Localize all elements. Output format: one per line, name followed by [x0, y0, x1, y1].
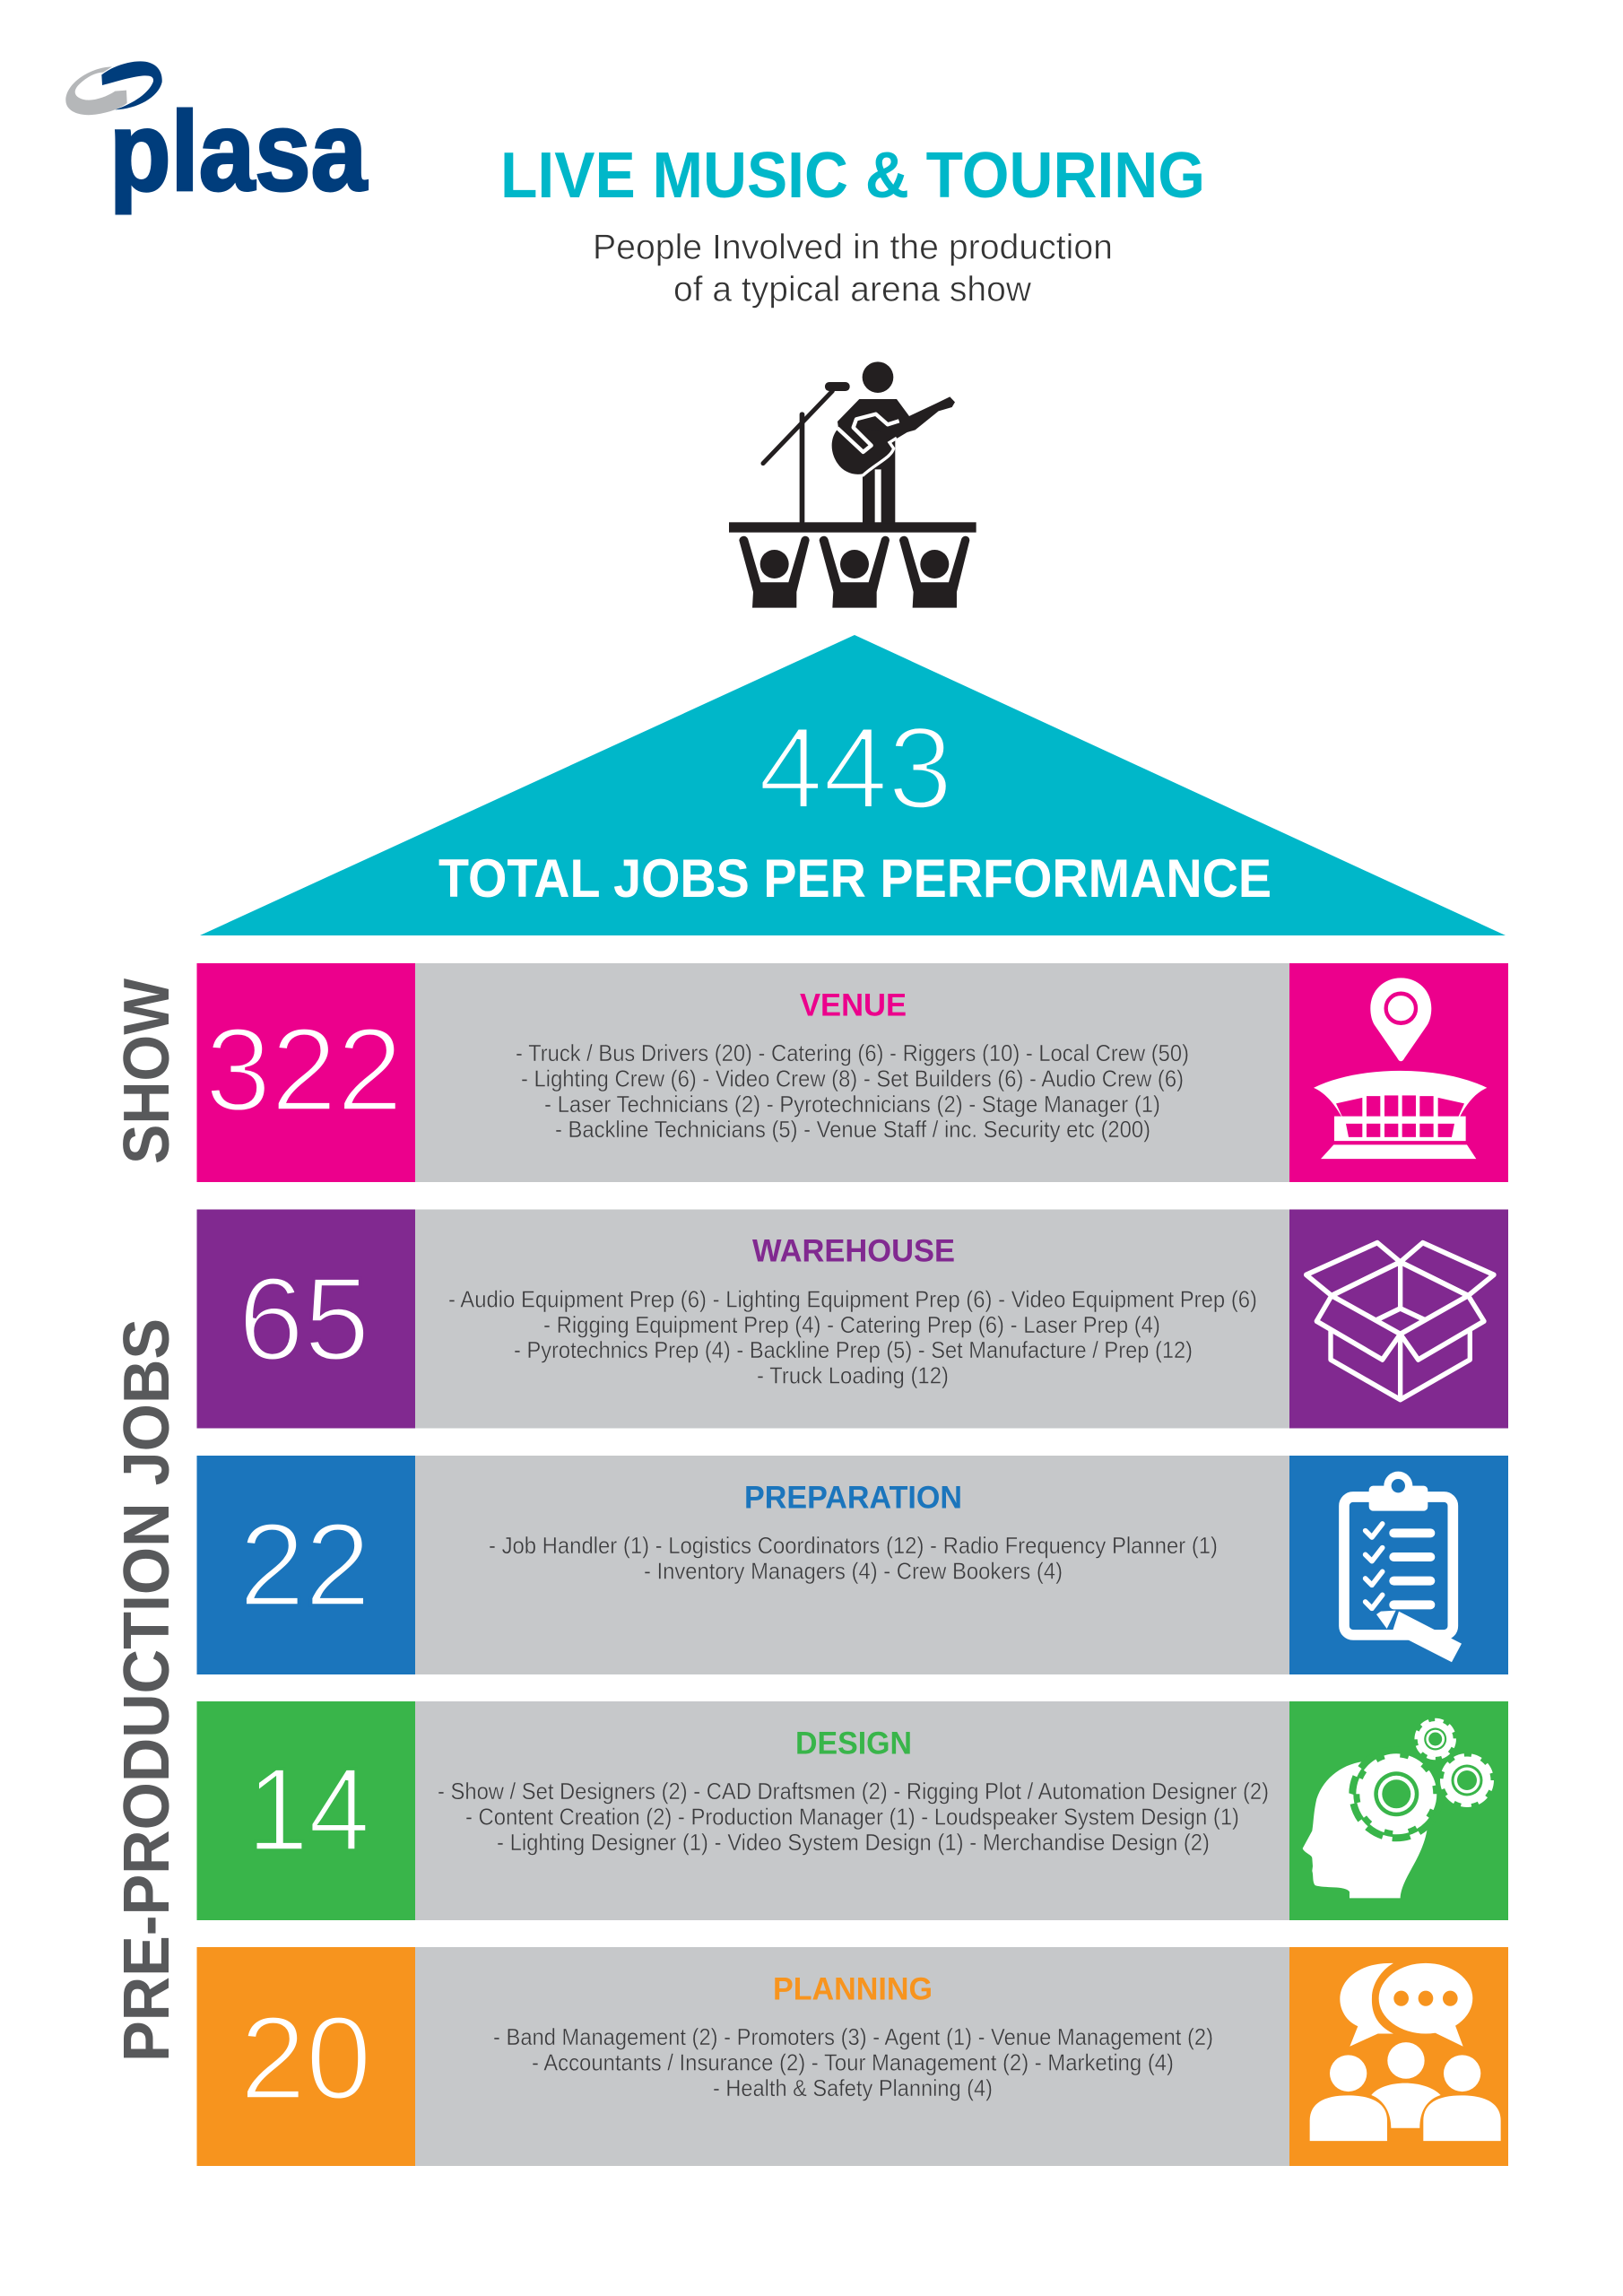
icon: people talking [1289, 1947, 1508, 2166]
warehouse job list: - Pyrotechnics Prep (4) - Backline Prep (5) - Set Manufacture / Prep (12) [514, 1336, 1193, 1363]
panel: planning [197, 1947, 1508, 2166]
total label: TOTAL JOBS PER PERFORMANCE [438, 848, 1271, 909]
icon: open box [1289, 1209, 1508, 1428]
planning job list: - Band Management (2) - Promoters (3) - Agent (1) - Venue Management (2) [493, 2023, 1213, 2050]
tile: 14: 14 [247, 1744, 369, 1875]
warehouse job list [448, 1286, 1257, 1388]
tile: 322: 322 [205, 1004, 403, 1135]
warehouse job list: - Audio Equipment Prep (6) - Lighting Equipment Prep (6) - Video Equipment Prep (6) [448, 1286, 1257, 1313]
tile: 65: 65 [239, 1253, 369, 1385]
preparation job list: - Job Handler (1) - Logistics Coordinators (12) - Radio Frequency Planner (1) [489, 1532, 1218, 1559]
heading: venue: VENUE [800, 988, 907, 1022]
planning job list: - Health & Safety Planning (4) [713, 2074, 993, 2101]
planning job list: - Accountants / Insurance (2) - Tour Management (2) - Marketing (4) [532, 2048, 1174, 2075]
side label: pre-production jobs: PRE-PRODUCTION JOBS [111, 1318, 183, 2062]
tile: 65 [197, 1209, 415, 1428]
venue job list: - Truck / Bus Drivers (20) - Catering (6) - Riggers (10) - Local Crew (50) [516, 1039, 1189, 1066]
icon: clipboard checklist [1289, 1456, 1508, 1674]
venue job list [516, 1039, 1189, 1143]
venue job list: - Lighting Crew (6) - Video Crew (8) - Set Builders (6) - Audio Crew (6) [521, 1065, 1184, 1092]
total number: 443 [759, 702, 952, 833]
warehouse job list: - Rigging Equipment Prep (4) - Catering Prep (6) - Laser Prep (4) [543, 1311, 1160, 1338]
subtitle [593, 228, 1113, 309]
tile: 14 [197, 1701, 415, 1920]
panel: design [197, 1701, 1508, 1920]
preparation job list [489, 1532, 1218, 1584]
logo: plasa [65, 61, 368, 214]
venue job list: - Laser Technicians (2) - Pyrotechnicians (2) - Stage Manager (1) [544, 1091, 1160, 1118]
design job list: - Content Creation (2) - Production Manager (1) - Loudspeaker System Design (1) [465, 1803, 1239, 1830]
venue job list: - Backline Technicians (5) - Venue Staff / inc. Security etc (200) [555, 1116, 1150, 1143]
tile: 322 [197, 963, 415, 1182]
warehouse job list: - Truck Loading (12) [757, 1361, 949, 1388]
panel: preparation [197, 1456, 1508, 1674]
heading: design: DESIGN [795, 1726, 912, 1761]
heading: warehouse: WAREHOUSE [752, 1234, 955, 1268]
tile: 20: 20 [240, 1992, 371, 2124]
design job list [438, 1778, 1269, 1856]
side label: show: SHOW [111, 978, 183, 1164]
tile: 22 [197, 1456, 415, 1674]
planning job list [493, 2023, 1213, 2101]
title: LIVE MUSIC & TOURING [500, 140, 1205, 212]
icon: guitarist on stage with audience [729, 361, 976, 608]
heading: planning: PLANNING [773, 1971, 933, 2007]
panel: warehouse [197, 1209, 1508, 1428]
design job list: - Lighting Designer (1) - Video System Design (1) - Merchandise Design (2) [497, 1829, 1210, 1856]
roof: total jobs [200, 635, 1506, 935]
panel: venue [197, 963, 1508, 1182]
heading: preparation: PREPARATION [744, 1480, 962, 1516]
icon: head with gears [1289, 1701, 1508, 1920]
subtitle: of a typical arena show [673, 271, 1032, 309]
logo: plasa: plasa [109, 90, 368, 214]
design job list: - Show / Set Designers (2) - CAD Draftsmen (2) - Rigging Plot / Automation Designer (2) [438, 1778, 1269, 1805]
tile: 22: 22 [239, 1499, 370, 1631]
tile: 20 [197, 1947, 415, 2166]
preparation job list: - Inventory Managers (4) - Crew Bookers (4) [644, 1557, 1063, 1584]
subtitle: People Involved in the production [593, 228, 1113, 267]
icon: venue pin and arena [1289, 963, 1508, 1182]
